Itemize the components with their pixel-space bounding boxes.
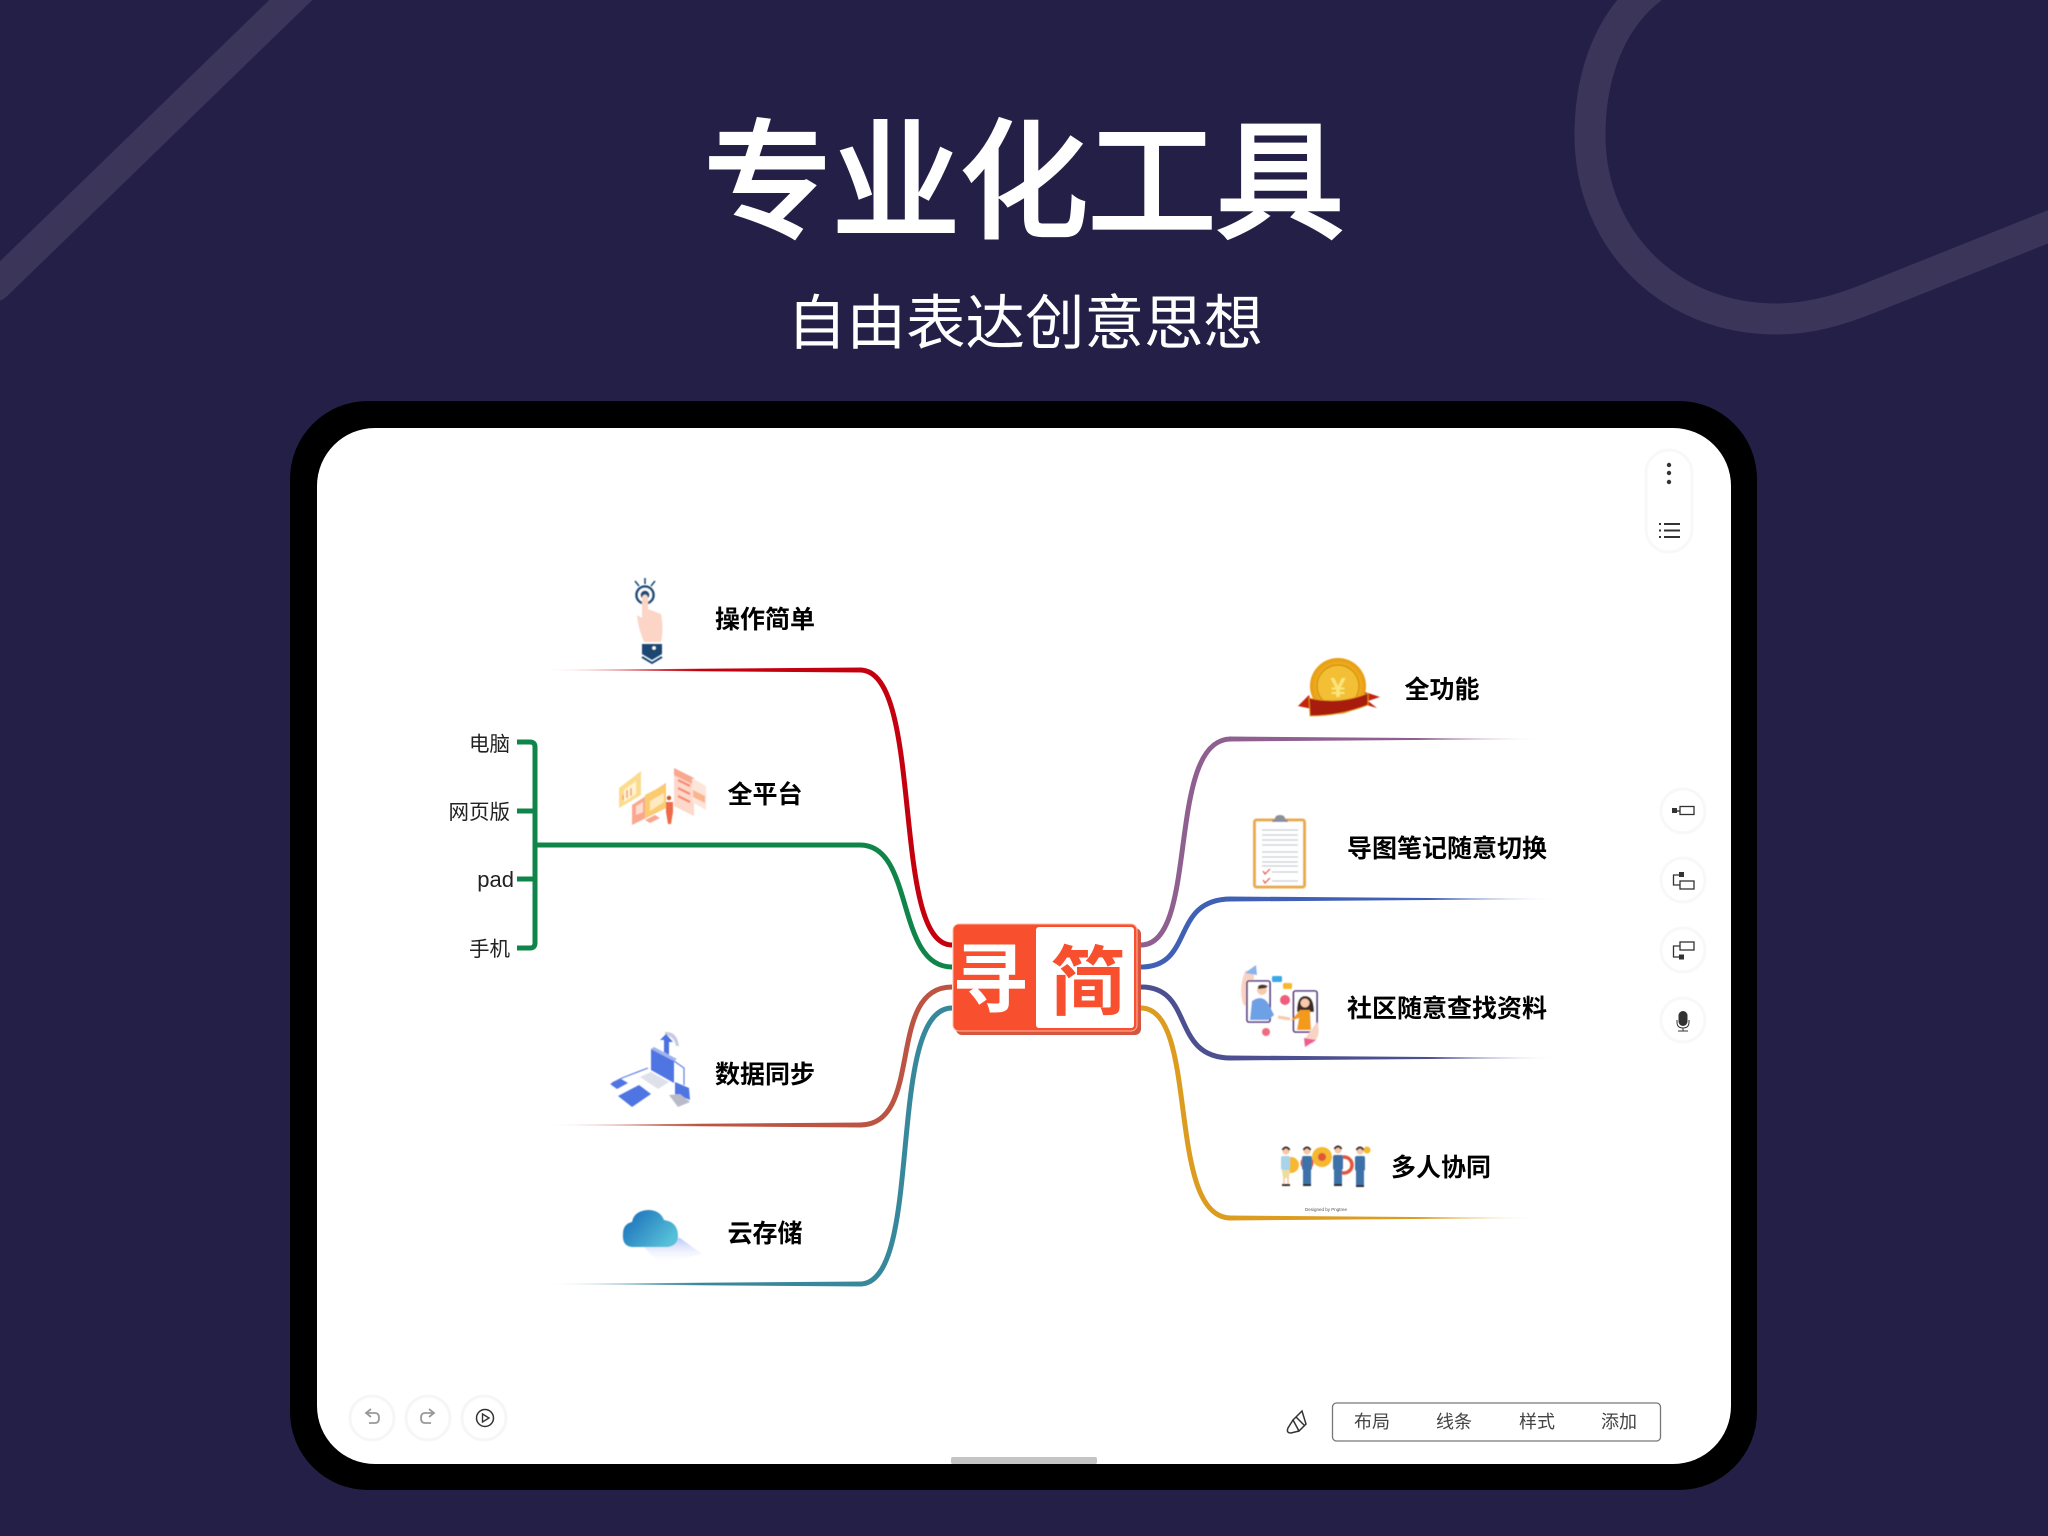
subtitle: 自由表达创意思想 xyxy=(787,290,1263,357)
tablet screen xyxy=(317,428,1731,1464)
label: 多人协同: 多人协同 xyxy=(1391,1154,1491,1182)
branch: 操作简单 xyxy=(543,668,952,945)
tab: 布局: 布局 xyxy=(1354,1412,1390,1432)
bottom toolbar xyxy=(1332,1403,1660,1441)
mind map connectors xyxy=(535,668,1558,1286)
icon: multi-platform screens xyxy=(619,768,706,825)
branch: 导图笔记随意切换 xyxy=(1141,896,1558,967)
button: child above node xyxy=(1661,928,1705,972)
side tool buttons xyxy=(1661,789,1705,1042)
label: 全功能: 全功能 xyxy=(1404,676,1480,704)
branch: 云存储 xyxy=(545,1008,952,1286)
icon: tapping hand xyxy=(635,578,662,663)
tab: 添加: 添加 xyxy=(1601,1412,1637,1432)
icon: gold medal with ribbon xyxy=(1298,658,1380,716)
icon: cloud xyxy=(623,1210,702,1264)
label: pad: pad xyxy=(477,867,514,892)
label: 云存储: 云存储 xyxy=(727,1220,803,1248)
icon: data sync devices xyxy=(610,1032,690,1107)
credit text: Designed by Pngtree xyxy=(1305,1207,1348,1212)
icon: more dots xyxy=(1667,463,1671,484)
button: undo xyxy=(350,1396,394,1440)
branch: 社区随意查找资料 xyxy=(1141,987,1558,1060)
label: 导图笔记随意切换: 导图笔记随意切换 xyxy=(1347,834,1547,863)
icon: community phones xyxy=(1241,965,1319,1047)
bottom-left controls xyxy=(350,1396,506,1440)
menu pill xyxy=(1646,450,1692,552)
button: child below node xyxy=(1661,858,1705,902)
tab: 线条: 线条 xyxy=(1436,1412,1472,1432)
icon: outline list xyxy=(1659,524,1680,537)
tab: 样式: 样式 xyxy=(1519,1412,1555,1432)
branch: 全平台 xyxy=(535,845,952,967)
label: 全平台: 全平台 xyxy=(727,780,803,809)
tablet device frame xyxy=(290,401,1757,1490)
central node xyxy=(952,924,1141,1035)
branch: 多人协同 xyxy=(1141,1008,1540,1220)
title: 专业化工具 xyxy=(704,112,1344,255)
icon: gold medal with ribbon: ¥ xyxy=(1330,672,1346,703)
branch: 数据同步 xyxy=(545,987,952,1128)
home indicator xyxy=(951,1457,1097,1464)
label: 网页版: 网页版 xyxy=(448,801,510,824)
label: 社区随意查找资料: 社区随意查找资料 xyxy=(1347,994,1547,1023)
label: 电脑: 电脑 xyxy=(469,733,510,756)
button: microphone xyxy=(1661,998,1705,1042)
button: sibling node xyxy=(1661,789,1705,833)
label: 操作简单: 操作简单 xyxy=(715,606,815,634)
bracket: platforms xyxy=(517,742,535,948)
icon: brush xyxy=(1287,1411,1306,1433)
central node: 简 xyxy=(1050,941,1126,1026)
branch: 全功能 xyxy=(1141,736,1545,945)
icon: clipboard checklist xyxy=(1254,815,1304,887)
label: 手机: 手机 xyxy=(469,938,510,961)
button: play xyxy=(462,1396,506,1440)
central node: 寻 xyxy=(952,938,1028,1023)
decorative diagonal line xyxy=(0,0,330,286)
icon: team with gears xyxy=(1281,1146,1370,1186)
decorative curved line xyxy=(1590,0,2048,319)
button: redo xyxy=(406,1396,450,1440)
label: 数据同步: 数据同步 xyxy=(715,1061,815,1089)
